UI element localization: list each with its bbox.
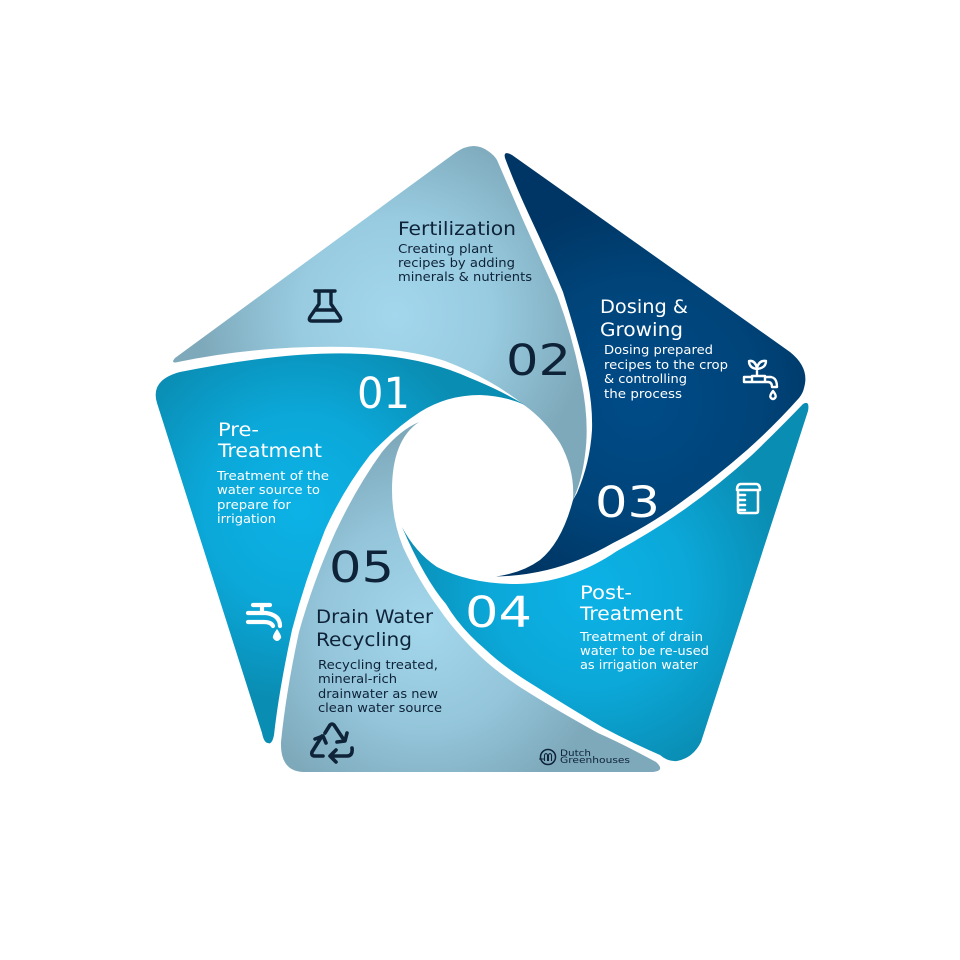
heading: Dosing & Growing: Dosing & (600, 297, 688, 318)
heading: Post-Treatment: Post- (580, 583, 632, 604)
text: post-treatment description (579, 630, 709, 672)
panel: 01 Pre-Treatment (156, 353, 525, 743)
text: drain water description: Recycling treated, (318, 658, 438, 672)
icon: recycle arrows (312, 724, 352, 762)
text: pre-treatment description: irrigation (217, 512, 276, 526)
icon: beaker (737, 484, 760, 513)
text: dosing description: Dosing prepared (604, 343, 713, 357)
heading: Drain Water Recycling: Drain Water (316, 607, 434, 628)
text: post-treatment description: as irrigation water (580, 658, 698, 672)
text: fertilization description: Creating plant (398, 242, 493, 256)
panel: 05 Drain Water Recycling (281, 422, 660, 772)
number: 03: 03 (595, 478, 660, 528)
text: post-treatment description: water to be re-used (580, 644, 709, 658)
logo: Dutch Greenhouses: Greenhouses (560, 756, 630, 766)
text: fertilization description (398, 242, 532, 284)
heading: Drain Water Recycling: Recycling (316, 630, 412, 651)
text: dosing description: & controlling (604, 372, 687, 386)
text: drain water description (318, 658, 442, 715)
shape: dosing blade (496, 153, 805, 577)
heading: Drain Water Recycling (316, 607, 434, 651)
heading: Pre-Treatment: Pre- (218, 420, 259, 441)
heading: Dosing & Growing: Growing (600, 320, 683, 341)
logo: Dutch Greenhouses (539, 749, 630, 766)
number: 02: 02 (506, 336, 571, 386)
shape: drain water blade (281, 422, 660, 772)
text: pre-treatment description: water source to (217, 483, 320, 497)
shape: fertilization blade (173, 146, 587, 500)
text: fertilization description: recipes by adding (398, 256, 515, 270)
heading: Pre-Treatment (217, 420, 322, 462)
text: post-treatment description: Treatment of drain (579, 630, 703, 644)
text: drain water description: mineral-rich (318, 672, 397, 686)
icon: water tap (248, 605, 281, 641)
text: drain water description: drainwater as new (318, 687, 438, 701)
text: pre-treatment description (216, 469, 329, 526)
heading: Fertilization: Fertilization (398, 219, 516, 240)
text: drain water description: clean water source (318, 701, 442, 715)
text: dosing description: recipes to the crop (604, 358, 728, 372)
number: 05: 05 (329, 543, 394, 593)
icon: tap with plant (744, 361, 777, 399)
panel: 03 Dosing & Growing (496, 153, 805, 577)
text: dosing description: the process (604, 387, 682, 401)
heading: Post-Treatment: Treatment (579, 604, 683, 625)
shape: pre-treatment blade (156, 353, 525, 743)
heading: Dosing & Growing (600, 297, 688, 341)
shape: post-treatment blade (402, 403, 808, 761)
number: 01: 01 (357, 369, 410, 419)
panel: 02 Fertilization (173, 146, 587, 500)
text: fertilization description: minerals & nutrients (398, 270, 532, 284)
heading: Post-Treatment (579, 583, 683, 625)
text: pre-treatment description: Treatment of the (216, 469, 329, 483)
panel: 04 Post-Treatment (402, 403, 808, 761)
text: dosing description (604, 343, 728, 401)
icon: flask (309, 291, 341, 321)
logo: Dutch Greenhouses: Dutch (560, 749, 591, 759)
text: pre-treatment description: prepare for (217, 498, 291, 512)
heading: Pre-Treatment: Treatment (217, 441, 322, 462)
number: 04: 04 (465, 588, 532, 638)
